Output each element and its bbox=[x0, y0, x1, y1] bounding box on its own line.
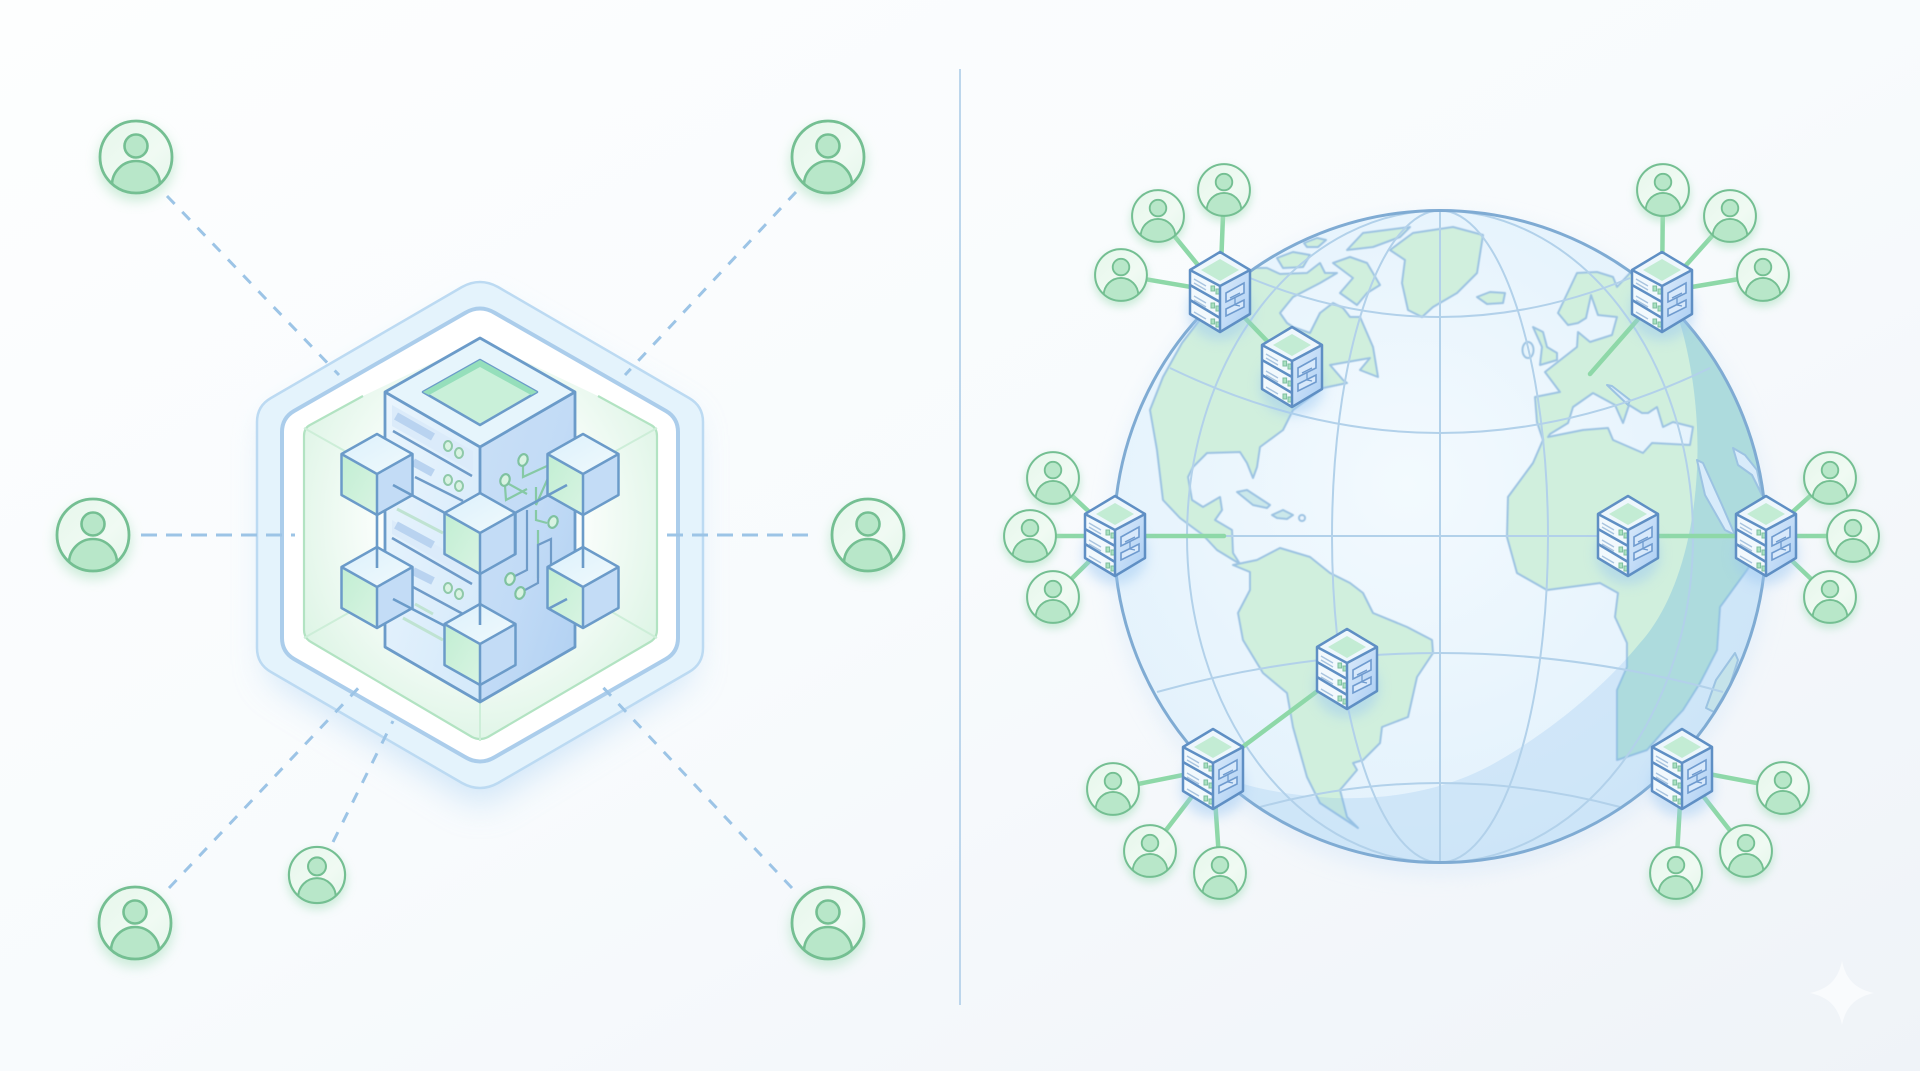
globe glow bbox=[1110, 215, 1770, 875]
panel: distributed network bbox=[1003, 164, 1900, 910]
edge servers bbox=[1083, 252, 1798, 817]
arctic islands bbox=[1277, 227, 1505, 305]
africa and eurasia bbox=[1507, 262, 1768, 760]
green server-user links bbox=[1030, 190, 1853, 873]
north and central america bbox=[1150, 263, 1378, 564]
graticule bbox=[1114, 210, 1766, 863]
circuit traces bbox=[505, 466, 548, 578]
outer hexagon frame bbox=[257, 282, 703, 788]
green containment cube bbox=[304, 340, 657, 741]
satellite cubes bbox=[342, 434, 618, 685]
globe bbox=[1115, 209, 1765, 864]
edge user icons bbox=[1003, 164, 1880, 910]
greenland bbox=[1390, 227, 1483, 317]
shaded crescent bbox=[1242, 321, 1762, 861]
inner hexagon frame bbox=[282, 308, 678, 762]
panel: centralized network bbox=[55, 121, 906, 975]
british isles bbox=[1533, 327, 1557, 365]
continents bbox=[1150, 227, 1768, 828]
rack rows bbox=[396, 416, 433, 581]
server tower bbox=[385, 338, 575, 702]
south america bbox=[1233, 548, 1433, 828]
panel divider bbox=[959, 69, 961, 1005]
icon: sparkle watermark bbox=[1810, 961, 1874, 1025]
rack panels bbox=[392, 405, 473, 580]
user icons around hub bbox=[55, 121, 906, 975]
tower screen bbox=[423, 360, 537, 425]
dashed connectors to central hub bbox=[141, 192, 817, 888]
inland seas and madagascar bbox=[1607, 385, 1762, 712]
caribbean islands bbox=[1237, 490, 1305, 521]
globe outline bbox=[1114, 210, 1766, 862]
hexagon glow bbox=[270, 305, 690, 805]
